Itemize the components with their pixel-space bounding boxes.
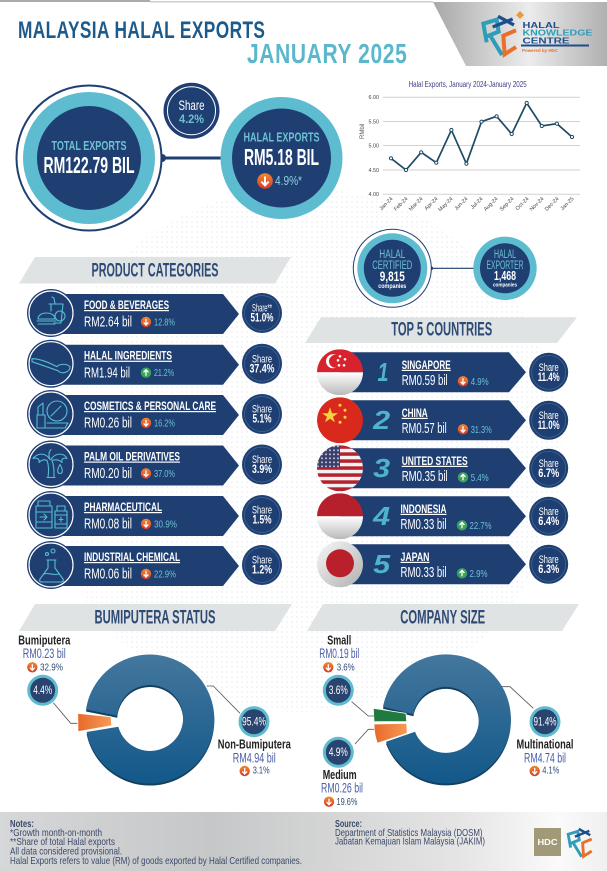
panel: cosmetics and personal care: COSMETICS & PERSONAL CARE bbox=[84, 399, 216, 413]
callout: small: RM0.19 bil bbox=[319, 645, 359, 661]
heading: top 5 countries bbox=[305, 317, 577, 343]
line chart: halal exports: Jan-25 bbox=[560, 196, 575, 212]
callout: bumiputera bbox=[18, 633, 71, 706]
notes: All data considered provisional. bbox=[10, 846, 122, 858]
callout: medium: RM0.26 bil bbox=[321, 780, 363, 796]
panel: industrial chemical: RM0.06 bil bbox=[84, 567, 132, 583]
panel: halal ingredients: 37.4% bbox=[250, 363, 274, 375]
callout: non-bumiputera: Non-Bumiputera bbox=[218, 737, 292, 751]
heading: company size bbox=[307, 604, 579, 631]
line chart: halal exports: May-24 bbox=[437, 196, 454, 213]
circle: share 4.2%: Share bbox=[178, 98, 204, 113]
panel: united states: 3 bbox=[373, 453, 391, 483]
heading: product categories: PRODUCT CATEGORIES bbox=[92, 260, 218, 282]
panel: cosmetics and personal care: 5.1% bbox=[252, 414, 272, 426]
callout: bumiputera: Bumiputera bbox=[18, 633, 71, 647]
panel: industrial chemical: INDUSTRIAL CHEMICAL bbox=[84, 550, 180, 564]
heading: bumiputera status: BUMIPUTERA STATUS bbox=[94, 606, 216, 628]
circle: halal exporter: EXPORTER bbox=[486, 260, 524, 272]
circle: halal exporter: companies bbox=[493, 282, 517, 288]
panel: food and beverages: 12.8% bbox=[154, 318, 175, 328]
panel: halal ingredients bbox=[27, 340, 282, 388]
panel: japan: 6.3% bbox=[538, 564, 559, 576]
line chart: halal exports: 4.00 bbox=[368, 192, 379, 198]
icon: indonesia flag bbox=[317, 493, 363, 539]
header bars and grey logo panel bbox=[0, 0, 607, 66]
logo: Halal Knowledge Centre: HALAL bbox=[522, 21, 560, 30]
panel: halal ingredients: 21.2% bbox=[154, 368, 174, 379]
icon: chemical flask bbox=[40, 549, 63, 582]
callout: medium: 19.6% bbox=[336, 796, 358, 808]
panel: japan: RM0.33 bil bbox=[400, 565, 446, 581]
panel: food and beverages: 51.0% bbox=[250, 313, 274, 325]
panel: japan: 5 bbox=[373, 549, 391, 579]
notes: Halal Exports refers to value (RM) of goods exported by Halal Certified companies. bbox=[10, 855, 302, 867]
circle: total exports: RM122.79 BIL bbox=[44, 152, 134, 178]
notes: *Growth month-on-month bbox=[10, 827, 102, 839]
callout: multinational: 4.1% bbox=[542, 765, 559, 777]
line chart: halal exports: Jun-24 bbox=[454, 196, 469, 212]
line chart: halal exports: Nov-24 bbox=[529, 196, 545, 213]
title bbox=[18, 17, 407, 70]
callout: multinational: Multinational bbox=[516, 737, 574, 751]
circle: halal certified: companies bbox=[378, 284, 407, 290]
circle: halal exports: RM5.18 BIL bbox=[244, 144, 319, 170]
panel: singapore: RM0.59 bil bbox=[402, 373, 448, 389]
panel: singapore: Share bbox=[539, 362, 559, 374]
source bbox=[335, 818, 485, 848]
panel: united states: 6.7% bbox=[538, 468, 559, 480]
circle: share 4.2% bbox=[164, 83, 220, 139]
callout: non-bumiputera: 95.4% bbox=[242, 716, 266, 728]
panel: japan: JAPAN bbox=[400, 550, 430, 564]
circle: halal exports: 4.9%* bbox=[275, 174, 302, 188]
panel: industrial chemical: Share bbox=[252, 555, 272, 567]
circle: halal certified bbox=[353, 229, 431, 307]
heading: company size: COMPANY SIZE bbox=[400, 606, 485, 628]
line chart: halal exports: Apr-24 bbox=[424, 196, 439, 212]
source: Source: bbox=[335, 818, 362, 830]
callout: small: 3.6% bbox=[329, 685, 348, 697]
callout: medium bbox=[321, 737, 363, 808]
notes bbox=[10, 818, 302, 867]
callout: small bbox=[319, 633, 359, 706]
callout: bumiputera: 32.9% bbox=[40, 662, 63, 674]
callout: non-bumiputera bbox=[218, 706, 292, 777]
panel: industrial chemical bbox=[27, 541, 282, 589]
callout: small: 3.6% bbox=[337, 662, 355, 674]
panel: united states: 5.4% bbox=[471, 473, 489, 484]
panel: palm oil derivatives: PALM OIL DERIVATIVES bbox=[84, 450, 180, 464]
donut chart: company size bbox=[352, 654, 533, 785]
panel: japan: 2.9% bbox=[470, 569, 488, 580]
line chart: halal exports: 6.00 bbox=[368, 95, 379, 101]
panel: singapore: 4.9% bbox=[471, 377, 489, 388]
line chart: halal exports: Jul-24 bbox=[470, 196, 484, 211]
donut chart: bumiputera status bbox=[53, 655, 240, 786]
icon: lipstick and compact bbox=[37, 401, 68, 428]
callout: small: Small bbox=[327, 633, 351, 647]
callout: multinational bbox=[516, 706, 574, 777]
panel: pharmaceutical: PHARMACEUTICAL bbox=[84, 500, 162, 514]
panel: pharmaceutical: 1.5% bbox=[252, 515, 272, 527]
panel: palm oil derivatives: Share bbox=[252, 454, 272, 466]
logo: RC cube bbox=[568, 829, 592, 857]
panel: palm oil derivatives: RM0.20 bil bbox=[84, 466, 132, 482]
line chart: halal exports: Dec-24 bbox=[544, 196, 560, 213]
panel: food and beverages: FOOD & BEVERAGES bbox=[84, 298, 169, 312]
panel: singapore: 1 bbox=[378, 357, 388, 387]
logo: Halal Knowledge Centre: KNOWLEDGE bbox=[522, 29, 593, 38]
panel: united states: Share bbox=[539, 458, 559, 470]
callout: non-bumiputera: RM4.94 bil bbox=[233, 750, 276, 766]
line chart: halal exports: Jan-24 bbox=[379, 196, 394, 212]
panel: industrial chemical: 22.9% bbox=[154, 570, 176, 580]
callout: multinational: 91.4% bbox=[534, 716, 556, 728]
panel: palm oil derivatives bbox=[27, 440, 282, 488]
panel: united states bbox=[317, 445, 568, 491]
line chart: halal exports: Sep-24 bbox=[499, 196, 515, 213]
circle: halal exporter: 1,468 bbox=[494, 268, 516, 283]
panel: china: RM0.57 bil bbox=[402, 421, 447, 437]
panel: china: Share bbox=[539, 410, 559, 422]
panel: food and beverages bbox=[27, 289, 282, 337]
line chart: halal exports: Mar-24 bbox=[408, 196, 424, 212]
icon: us flag bbox=[317, 445, 363, 491]
line chart: halal exports: Feb-24 bbox=[393, 196, 409, 213]
circle: halal exporter: HALAL bbox=[494, 249, 516, 261]
source: Jabatan Kemajuan Islam Malaysia (JAKIM) bbox=[335, 836, 485, 848]
circle: halal certified: HALAL bbox=[379, 249, 406, 261]
callout: bumiputera: 4.4% bbox=[33, 685, 52, 697]
notes: **Share of total Halal exports bbox=[10, 836, 115, 848]
heading: product categories bbox=[19, 257, 291, 284]
icon: japan flag bbox=[317, 541, 363, 587]
panel: singapore bbox=[317, 349, 568, 395]
panel: indonesia: 22.7% bbox=[470, 521, 492, 532]
callout: medium: 4.9% bbox=[329, 747, 348, 759]
line chart: halal exports: RMbil bbox=[360, 124, 366, 139]
circle: halal certified: 9,815 bbox=[380, 268, 405, 284]
panel: indonesia: Share bbox=[539, 506, 559, 518]
logo: Halal Knowledge Centre bbox=[483, 11, 593, 55]
heading: top 5 countries: TOP 5 COUNTRIES bbox=[391, 319, 492, 341]
source: Department of Statistics Malaysia (DOSM) bbox=[335, 827, 482, 839]
panel: food and beverages: Share** bbox=[252, 303, 272, 315]
connector: total to halal bbox=[158, 154, 222, 162]
panel: pharmaceutical: 30.9% bbox=[154, 520, 177, 530]
panel: indonesia: 6.4% bbox=[538, 516, 559, 528]
circle: total exports bbox=[16, 86, 162, 230]
heading: bumiputera status bbox=[19, 604, 292, 631]
panel: singapore: SINGAPORE bbox=[402, 358, 451, 372]
panel: china: 2 bbox=[372, 405, 391, 435]
panel: palm oil derivatives: 37.0% bbox=[154, 469, 175, 480]
circle: total exports: TOTAL EXPORTS bbox=[52, 138, 127, 153]
title: JANUARY 2025 bbox=[247, 39, 407, 70]
panel: cosmetics and personal care: Share bbox=[252, 404, 272, 416]
panel: halal ingredients: HALAL INGREDIENTS bbox=[84, 349, 172, 363]
circle: halal exporter bbox=[473, 237, 537, 300]
panel: china: 31.3% bbox=[471, 425, 492, 436]
panel: pharmaceutical: RM0.08 bil bbox=[84, 517, 132, 533]
panel: cosmetics and personal care: 16.2% bbox=[154, 418, 175, 430]
circle: halal exports: HALAL EXPORTS bbox=[244, 130, 320, 144]
line chart: halal exports: 5.50 bbox=[368, 120, 379, 126]
panel: cosmetics and personal care: RM0.26 bil bbox=[84, 416, 132, 432]
panel: pharmaceutical: Share bbox=[252, 505, 272, 517]
panel: indonesia: INDONESIA bbox=[400, 502, 447, 516]
panel: indonesia bbox=[317, 493, 568, 539]
panel: industrial chemical: 1.2% bbox=[252, 565, 272, 577]
icon: spoon bbox=[32, 359, 70, 373]
line chart: halal exports: 4.50 bbox=[368, 168, 379, 174]
panel: united states: UNITED STATES bbox=[402, 454, 468, 468]
panel: singapore: 11.4% bbox=[538, 372, 560, 384]
panel: pharmaceutical bbox=[27, 491, 282, 539]
icon: china flag bbox=[317, 397, 363, 443]
line chart: halal exports: Aug-24 bbox=[483, 196, 499, 213]
connector: certified to exporter bbox=[429, 266, 475, 270]
logo: Halal Knowledge Centre: CENTRE bbox=[522, 36, 570, 45]
callout: non-bumiputera: 3.1% bbox=[253, 765, 270, 777]
panel: china: 11.0% bbox=[538, 420, 560, 432]
line chart: halal exports: Halal Exports, January 2024-January 2025 bbox=[409, 79, 527, 89]
callout: multinational: RM4.74 bil bbox=[524, 750, 566, 766]
notes: Notes: bbox=[10, 818, 34, 830]
circle: share 4.2%: 4.2% bbox=[179, 112, 204, 126]
callout: medium: Medium bbox=[323, 768, 357, 782]
line chart: halal exports: Oct-24 bbox=[515, 196, 530, 212]
panel: indonesia: RM0.33 bil bbox=[400, 517, 446, 533]
icon: palm tree and oil drop bbox=[33, 450, 67, 478]
panel: food and beverages: RM2.64 bil bbox=[84, 315, 132, 331]
panel: indonesia: 4 bbox=[372, 501, 391, 531]
line chart: halal exports: 5.00 bbox=[368, 144, 379, 150]
background dotted globe bbox=[42, 191, 562, 712]
callout: bumiputera: RM0.23 bil bbox=[23, 645, 66, 661]
title: MALAYSIA HALAL EXPORTS bbox=[18, 17, 265, 44]
line chart: halal exports bbox=[360, 79, 580, 213]
icon: medicine bottles bbox=[36, 501, 67, 528]
icon: singapore flag bbox=[317, 349, 363, 395]
logo: HDC bbox=[534, 828, 561, 856]
panel: halal ingredients: RM1.94 bil bbox=[84, 365, 130, 381]
panel: japan bbox=[317, 541, 568, 587]
panel: united states: RM0.35 bil bbox=[402, 469, 448, 485]
circle: halal exports bbox=[220, 97, 342, 219]
panel: japan: Share bbox=[539, 554, 559, 566]
icon: burger and drink bbox=[37, 297, 65, 324]
panel: china bbox=[317, 397, 568, 443]
footer band bbox=[0, 812, 607, 871]
panel: cosmetics and personal care bbox=[27, 390, 282, 438]
circle: halal certified: CERTIFIED bbox=[372, 260, 412, 272]
panel: palm oil derivatives: 3.9% bbox=[252, 464, 272, 476]
panel: china: CHINA bbox=[402, 406, 428, 420]
logo: Halal Knowledge Centre: Powered by HDC bbox=[522, 48, 559, 53]
panel: halal ingredients: Share bbox=[252, 353, 272, 365]
logo: HDC: HDC bbox=[538, 837, 558, 847]
